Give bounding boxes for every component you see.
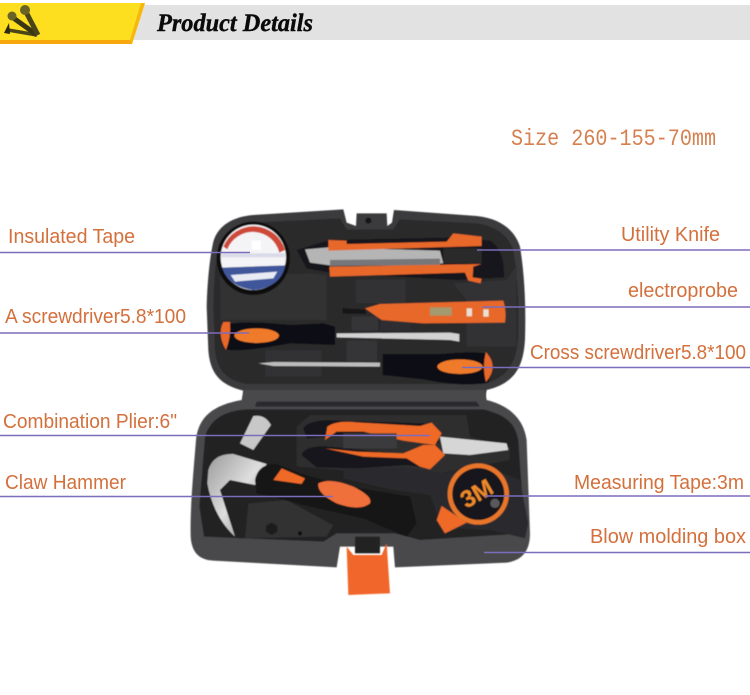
header banner [0,3,750,44]
icon: utility knife [297,233,504,283]
recess shape [297,415,510,477]
label: insulated tape: Insulated Tape [8,225,135,248]
heading: Product Details [156,10,313,37]
label: measuring tape: Measuring Tape:3m [574,471,744,494]
icon: crossed tools [4,5,38,35]
label: electroprobe: electroprobe [628,279,738,302]
recess shapes [356,279,406,303]
tool case: upper lid [207,209,525,400]
icon: insulated tape [217,222,290,295]
icon: pliers [302,420,508,469]
label: blow molding box: Blow molding box [590,525,747,548]
icon: flat screwdriver [220,322,459,350]
size text: Size 260-155-70mm [511,126,716,152]
tool case: lower tray [191,390,530,595]
label: combination plier: Combination Plier:6" [3,410,177,433]
label: claw hammer: Claw Hammer [5,471,126,494]
icon: measuring tape [343,463,528,538]
label: utility knife: Utility Knife [621,223,720,246]
labels [3,223,747,548]
icon: cross screwdriver [258,352,493,384]
icon: claw hammer [207,416,417,537]
icon: measuring tape: 3M [456,474,498,514]
icon: electroprobe [343,301,506,323]
icon: orange latch [347,537,390,595]
leader lines [0,250,750,552]
label: a screwdriver: A screwdriver5.8*100 [5,305,186,328]
